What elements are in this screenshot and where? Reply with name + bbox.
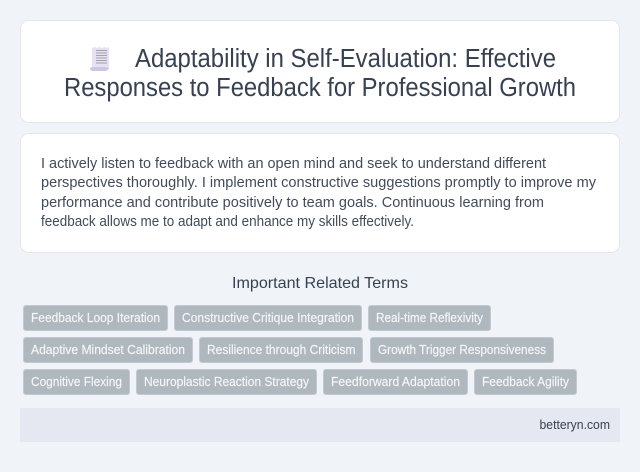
heading: related terms: Important Related Terms <box>232 275 408 292</box>
tag: Adaptive Mindset Calibration <box>24 338 192 362</box>
tag: Real-time Reflexivity <box>368 306 490 330</box>
tag: Constructive Critique Integration <box>174 306 362 330</box>
tag: Growth Trigger Responsiveness <box>370 338 554 362</box>
tag group: related terms <box>24 306 576 394</box>
tag: Feedforward Adaptation: Feedforward Adaptation <box>331 375 460 389</box>
title: Adaptability in Self-Evaluation: Effective <box>135 45 556 73</box>
panel: self-evaluation paragraph: feedback allows me to adapt and enhance my skills effectively. <box>41 213 414 230</box>
title <box>64 45 576 102</box>
tag: Feedback Agility <box>474 370 576 394</box>
panel: self-evaluation paragraph: perspectives thoroughly. I implement constructive suggestions promptly to improve my <box>41 174 596 191</box>
panel: self-evaluation paragraph: performance and contribute positively to team goals. Continuous learning from <box>41 194 544 211</box>
tag: Resilience through Criticism: Resilience through Criticism <box>207 343 356 357</box>
tag: Feedback Loop Iteration: Feedback Loop Iteration <box>31 311 160 325</box>
footer bar <box>20 408 620 442</box>
tag: Constructive Critique Integration: Constructive Critique Integration <box>182 311 354 325</box>
tag: Neuroplastic Reaction Strategy <box>136 370 316 394</box>
tag: Cognitive Flexing: Cognitive Flexing <box>31 375 122 389</box>
panel: self-evaluation paragraph: I actively listen to feedback with an open mind and seek to understand different <box>41 155 547 172</box>
tag: Feedforward Adaptation <box>324 370 468 394</box>
title: Responses to Feedback for Professional Growth <box>64 74 576 102</box>
tag: Growth Trigger Responsiveness: Growth Trigger Responsiveness <box>378 343 546 357</box>
tag: Adaptive Mindset Calibration: Adaptive Mindset Calibration <box>31 343 185 357</box>
tag: Real-time Reflexivity: Real-time Reflexivity <box>376 311 484 325</box>
tag: Cognitive Flexing <box>24 370 130 394</box>
icon: document scroll <box>90 47 109 71</box>
tag: Resilience through Criticism <box>200 338 362 362</box>
tag: Feedback Loop Iteration <box>24 306 168 330</box>
panel: self-evaluation paragraph <box>20 134 620 252</box>
tag: Feedback Agility: Feedback Agility <box>482 375 570 389</box>
header panel <box>20 20 620 122</box>
footer: site name: betteryn.com <box>540 418 610 432</box>
tag: Neuroplastic Reaction Strategy: Neuroplastic Reaction Strategy <box>144 375 310 389</box>
